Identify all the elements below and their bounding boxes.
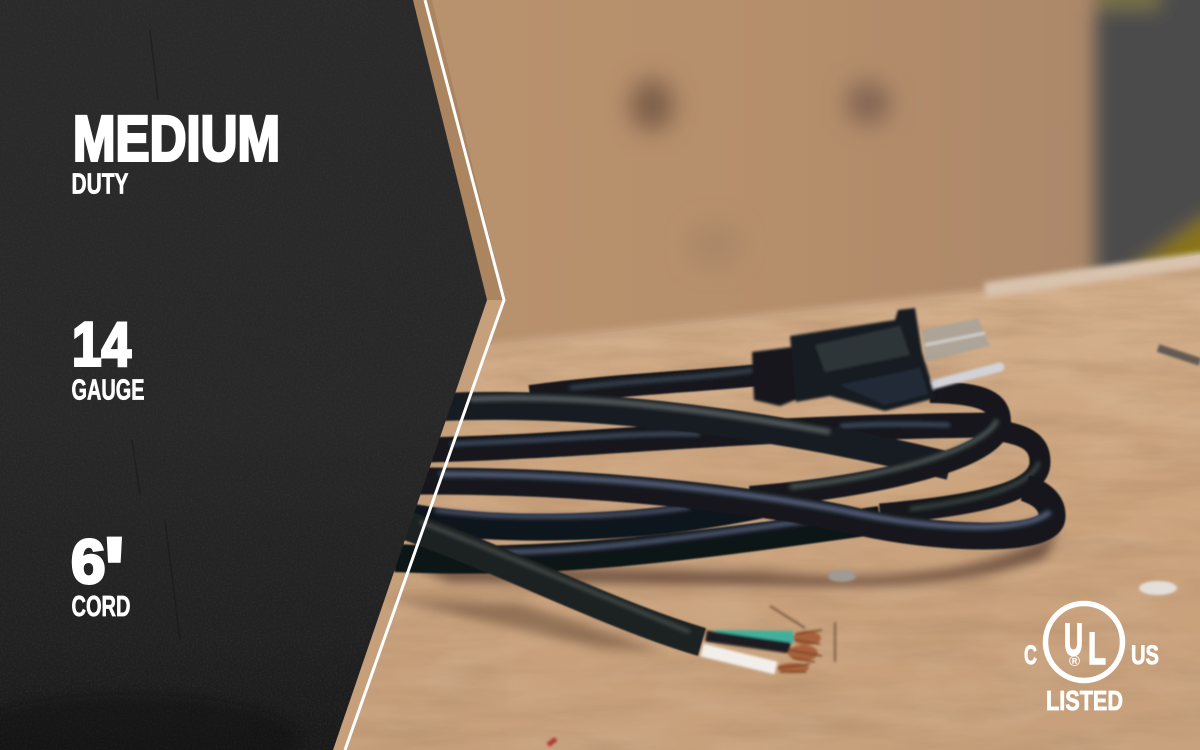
panel grunge texture (0, 30, 412, 750)
photo: workbench background (333, 0, 1200, 750)
UL listed logo (1024, 604, 1159, 716)
lower cable (395, 518, 880, 560)
letters us: US (1131, 640, 1159, 670)
green wire (712, 630, 794, 643)
dark wall at right (1095, 0, 1200, 290)
label: duty: DUTY (72, 168, 128, 200)
table edge highlight (490, 290, 1000, 345)
letter c: C (1024, 640, 1037, 670)
backdrop knots (630, 79, 890, 267)
cable behind plug (530, 370, 770, 396)
label: cord: CORD (72, 591, 130, 623)
plug blades (922, 318, 990, 362)
black wire (706, 636, 790, 648)
loose cable end (405, 522, 702, 642)
heading: 6 feet: 6 (71, 528, 105, 597)
left board strip between panel and line (333, 0, 505, 750)
copper strands (777, 631, 821, 673)
plug (752, 308, 1000, 411)
outer loop (880, 430, 1040, 514)
registered mark: ® (1069, 653, 1080, 670)
stat: 14 gauge (72, 310, 144, 406)
table surface (340, 255, 1200, 750)
heading: 14: 14 (72, 310, 131, 380)
heading: 6 feet: ' (103, 518, 126, 624)
power cord coils (395, 370, 1052, 642)
table wood grain (340, 250, 1200, 750)
plug body (790, 308, 936, 411)
listed: LISTED (1046, 685, 1123, 716)
upper thick cable (440, 398, 950, 466)
ground pin (932, 367, 1000, 385)
plywood backdrop (400, 0, 1120, 380)
UL ring (1046, 604, 1122, 680)
white wire (702, 650, 776, 668)
letter L: L (1088, 623, 1106, 674)
table specks (548, 348, 1200, 745)
stat: medium duty (72, 102, 280, 200)
white chevron line (345, 0, 504, 750)
cable shadows (385, 530, 1060, 652)
heading: medium: MEDIUM (73, 102, 280, 174)
strain relief (752, 347, 800, 406)
exposed wires (702, 630, 822, 673)
dark panel (0, 0, 490, 750)
stat: 6 ft cord (71, 518, 130, 624)
middle cable (405, 505, 760, 527)
back cable (425, 424, 990, 450)
letter U: U (1064, 614, 1083, 665)
label: gauge: GAUGE (72, 374, 144, 406)
inner loop (750, 392, 1000, 497)
front big cable (415, 474, 1052, 536)
